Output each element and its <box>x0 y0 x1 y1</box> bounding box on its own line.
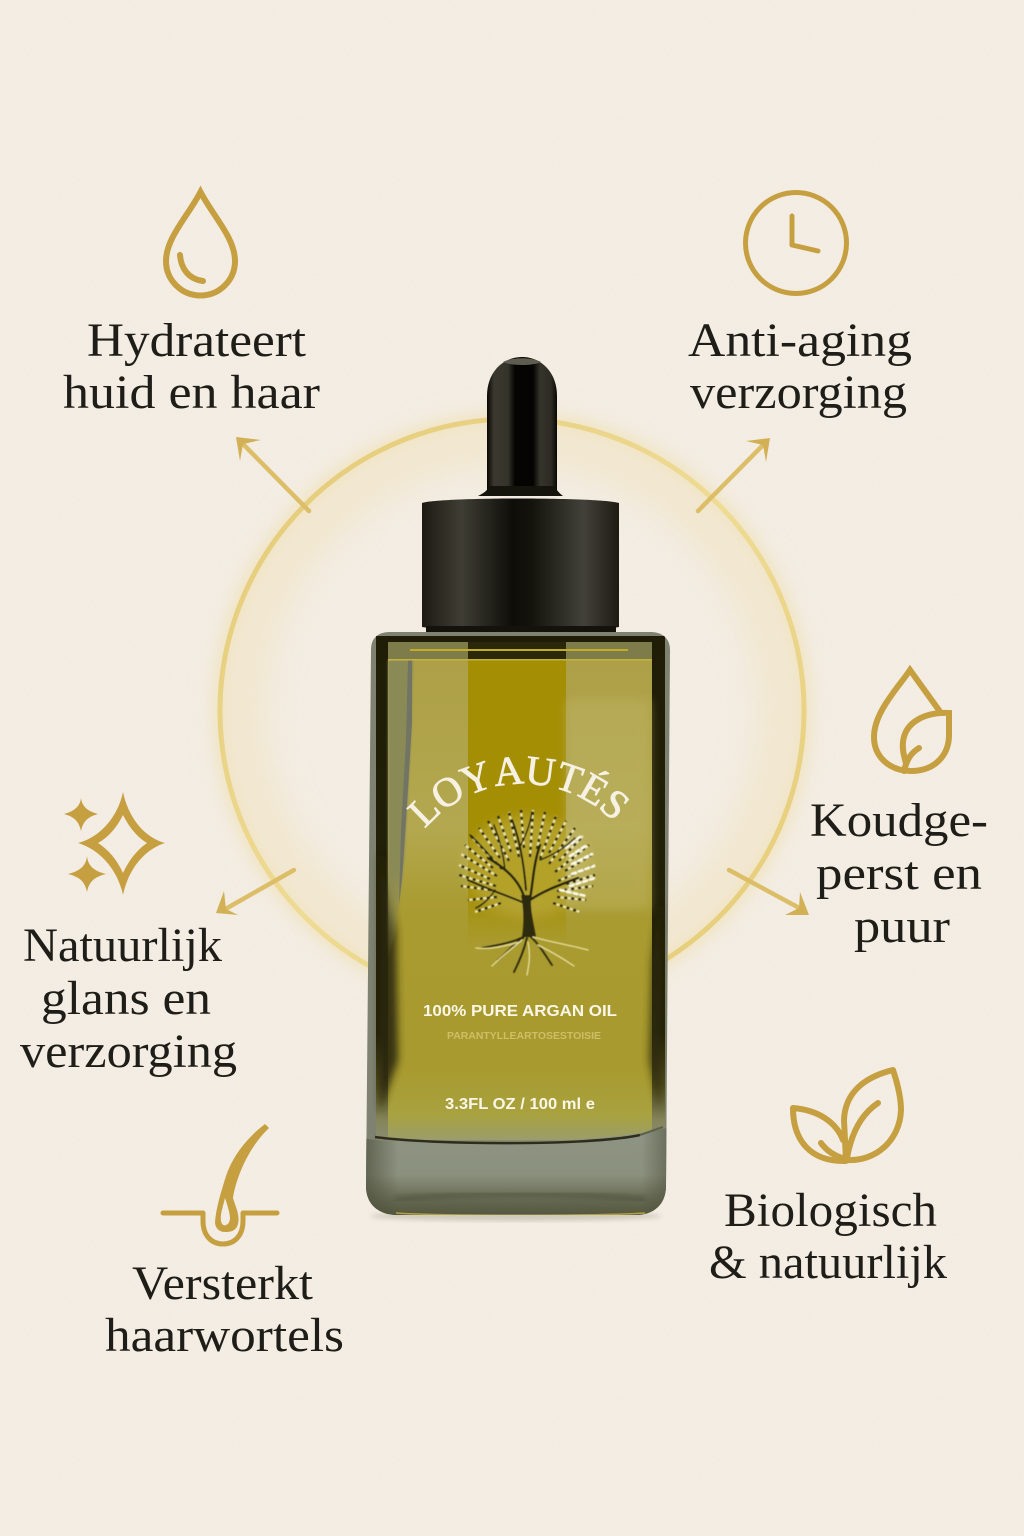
icon: leaves <box>793 1070 901 1161</box>
label: Anti-aging verzorging <box>688 314 912 419</box>
label: Natuurlijk glans en verzorging: glans en <box>41 972 211 1025</box>
branches <box>468 812 578 908</box>
label: Natuurlijk glans en verzorging: verzorging <box>20 1025 237 1078</box>
icon: sparkles <box>64 792 165 895</box>
cap <box>422 498 619 633</box>
icon: hair root <box>163 1124 277 1244</box>
product name: 100% PURE ARGAN OIL <box>423 1003 617 1020</box>
glass body <box>360 625 680 1225</box>
right light area <box>566 700 650 910</box>
roots <box>476 936 588 975</box>
shoulder <box>388 641 652 659</box>
label: Hydrateert huid en haar: Hydrateert <box>87 314 307 367</box>
label: Koudgeperst en puur: perst en <box>816 847 982 900</box>
label: Versterkt haarwortels: Versterkt <box>132 1257 314 1310</box>
label: Anti-aging verzorging: verzorging <box>690 366 907 419</box>
label: Hydrateert huid en haar <box>63 314 320 419</box>
arrow: middle right <box>729 870 809 915</box>
product: dropper bottle <box>366 357 670 1223</box>
label: Versterkt haarwortels <box>105 1257 344 1362</box>
icon: drop with leaf <box>874 670 949 771</box>
glass rim <box>360 625 680 1225</box>
left glass band <box>388 660 413 960</box>
icon: water drop <box>166 192 235 296</box>
volume: 3.3FL OZ / 100 ml e <box>445 1096 595 1113</box>
dropper bulb <box>478 357 563 496</box>
arrow: top right <box>698 438 770 511</box>
brand name: LOY AUTÉS <box>406 756 630 828</box>
label: Natuurlijk glans en verzorging: Natuurlijk <box>23 919 222 972</box>
label: Hydrateert huid en haar: huid en haar <box>63 366 320 419</box>
canopy leaves dark <box>459 810 595 912</box>
canopy leaves light <box>459 810 595 912</box>
label: Koudgeperst en puur: puur <box>854 900 950 953</box>
bottle shadow <box>370 1211 662 1221</box>
label: Biologisch & natuurlijk: & natuurlijk <box>709 1236 947 1289</box>
label: Koudgeperst en puur: Koudge- <box>810 794 988 847</box>
label: Anti-aging verzorging: Anti-aging <box>688 314 912 367</box>
trunk <box>521 895 536 937</box>
label: Koudgeperst en puur <box>810 794 988 953</box>
dark glass wall <box>376 636 665 1146</box>
liquid <box>388 660 652 1140</box>
label: Biologisch & natuurlijk: Biologisch <box>724 1184 937 1237</box>
arrow: top left <box>236 437 309 511</box>
tree logo <box>459 810 595 975</box>
arrow: middle left <box>216 870 294 915</box>
label: Natuurlijk glans en verzorging <box>20 919 237 1078</box>
base <box>366 1128 666 1215</box>
center band <box>468 660 566 945</box>
label: Biologisch & natuurlijk <box>709 1184 947 1289</box>
label: Versterkt haarwortels: haarwortels <box>105 1309 344 1362</box>
icon: clock <box>746 192 846 294</box>
golden ring with glow <box>220 419 804 1003</box>
fine print: PARANTYLLEARTOSESTOISIE <box>447 1031 601 1042</box>
canopy highlights <box>560 836 595 896</box>
canopy glow <box>465 816 589 916</box>
soft dark edges <box>380 850 398 1112</box>
